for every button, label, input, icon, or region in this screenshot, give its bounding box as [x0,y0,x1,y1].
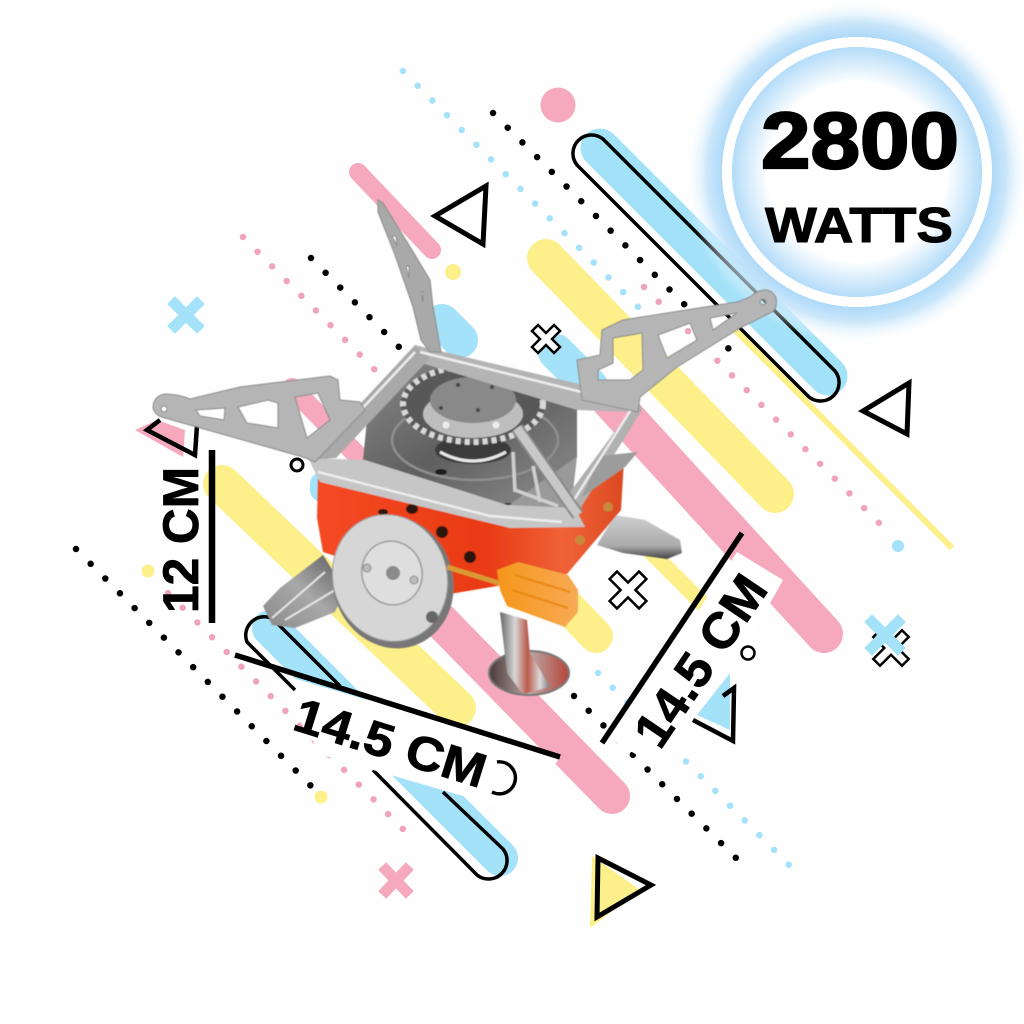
shapes: circles [142,88,904,804]
label: side 14.5 CM: 14.5 CM [623,564,778,757]
stove left foot [263,555,345,628]
brass screws [572,502,613,545]
dotted lines [76,71,881,879]
dimension: side width line [602,533,742,743]
label: front 14.5 CM: 14.5 CM [288,689,492,799]
front pot support [513,428,578,515]
outlined capsule top right [573,135,839,401]
right pot support [577,290,776,412]
wattage unit: WATTS [765,199,953,253]
dimension: height line [209,450,215,623]
plate top rim [415,345,638,412]
wattage badge [685,0,1024,344]
label: 12 CM: 12 CM [153,467,209,613]
plate front rim [308,458,585,528]
decorative arc beside label [492,762,515,794]
white band behind side label [612,552,783,770]
stove right foot [597,515,682,559]
burner [392,364,558,511]
rim highlights [316,352,634,522]
dark well [363,358,577,507]
white band behind front label [296,679,560,812]
plate right strut [568,400,642,512]
stove red body [317,460,624,594]
stove bottom foot [489,612,569,695]
dimension: front width line [235,655,560,757]
orange knob [497,562,578,627]
brass stem [447,567,502,584]
cross icons [175,304,902,891]
left pot support [153,376,365,462]
plate left folded strut [308,345,430,460]
stove [153,200,776,695]
outlined capsule lower left [246,617,507,879]
top pot support [378,200,441,352]
support wedge [507,457,577,512]
background stripes [222,148,952,858]
air holes [378,471,602,563]
plate flap [582,452,638,497]
wattage number: 2800 [761,96,959,185]
triangle outlines and fills [135,186,909,928]
control disc [315,500,471,664]
